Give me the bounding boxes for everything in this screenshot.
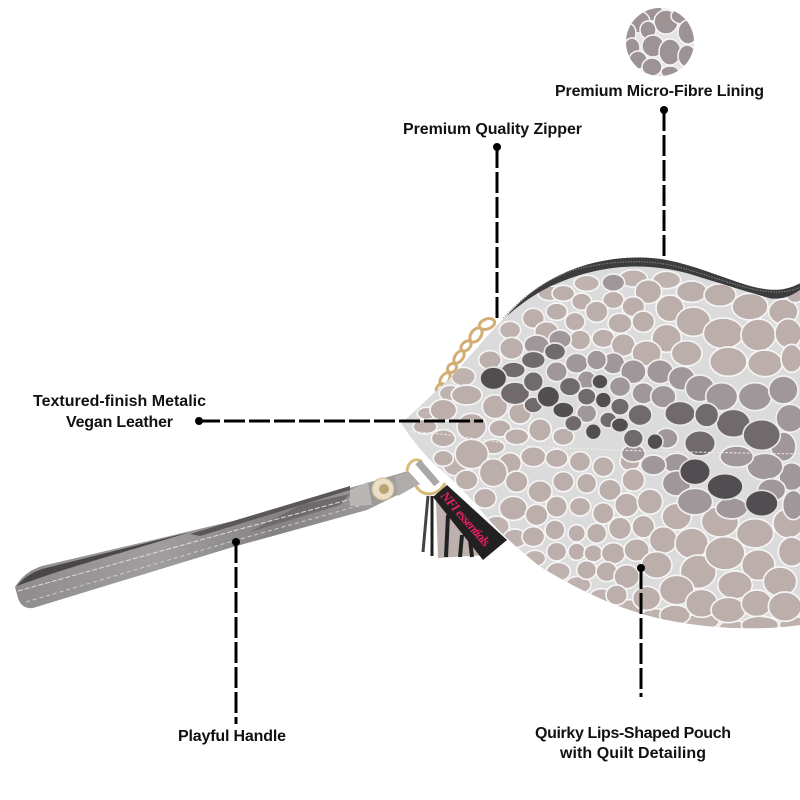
zipper pull chain	[435, 317, 496, 394]
gold rings	[407, 460, 445, 494]
lips-shaped pouch	[400, 250, 800, 650]
callout: quirky lips-shaped pouch: Quirky Lips-Shaped Pouch	[535, 725, 731, 742]
callout: premium micro-fibre lining	[555, 83, 764, 259]
light scales	[413, 280, 800, 634]
callout: quirky lips-shaped pouch	[535, 564, 731, 762]
callout: vegan leather: Vegan Leather	[66, 414, 173, 431]
top material swatch	[626, 8, 694, 76]
handle strap	[15, 471, 420, 608]
quilt stitch line	[410, 432, 800, 454]
callout: vegan leather	[33, 393, 483, 431]
edge scales	[417, 270, 800, 634]
tassel	[423, 496, 486, 558]
callout: playful handle	[178, 538, 286, 745]
callout: premium micro-fibre lining: Premium Micro-Fibre Lining	[555, 83, 764, 100]
callout: quirky lips-shaped pouch: with Quilt Detailing	[559, 745, 706, 762]
darkest scales	[480, 367, 778, 516]
snap button	[372, 478, 394, 500]
callout: playful handle: Playful Handle	[178, 728, 286, 745]
callout: premium quality zipper: Premium Quality Zipper	[403, 121, 582, 138]
dark scales	[500, 343, 780, 456]
callout: premium quality zipper	[403, 121, 582, 319]
brand tag text: NFI essentials	[437, 487, 494, 549]
brand tag	[433, 485, 507, 560]
zipper band	[493, 258, 800, 337]
body base	[400, 250, 800, 650]
mid grey scales	[524, 274, 800, 520]
callout: vegan leather: Textured-finish Metalic	[33, 393, 206, 410]
